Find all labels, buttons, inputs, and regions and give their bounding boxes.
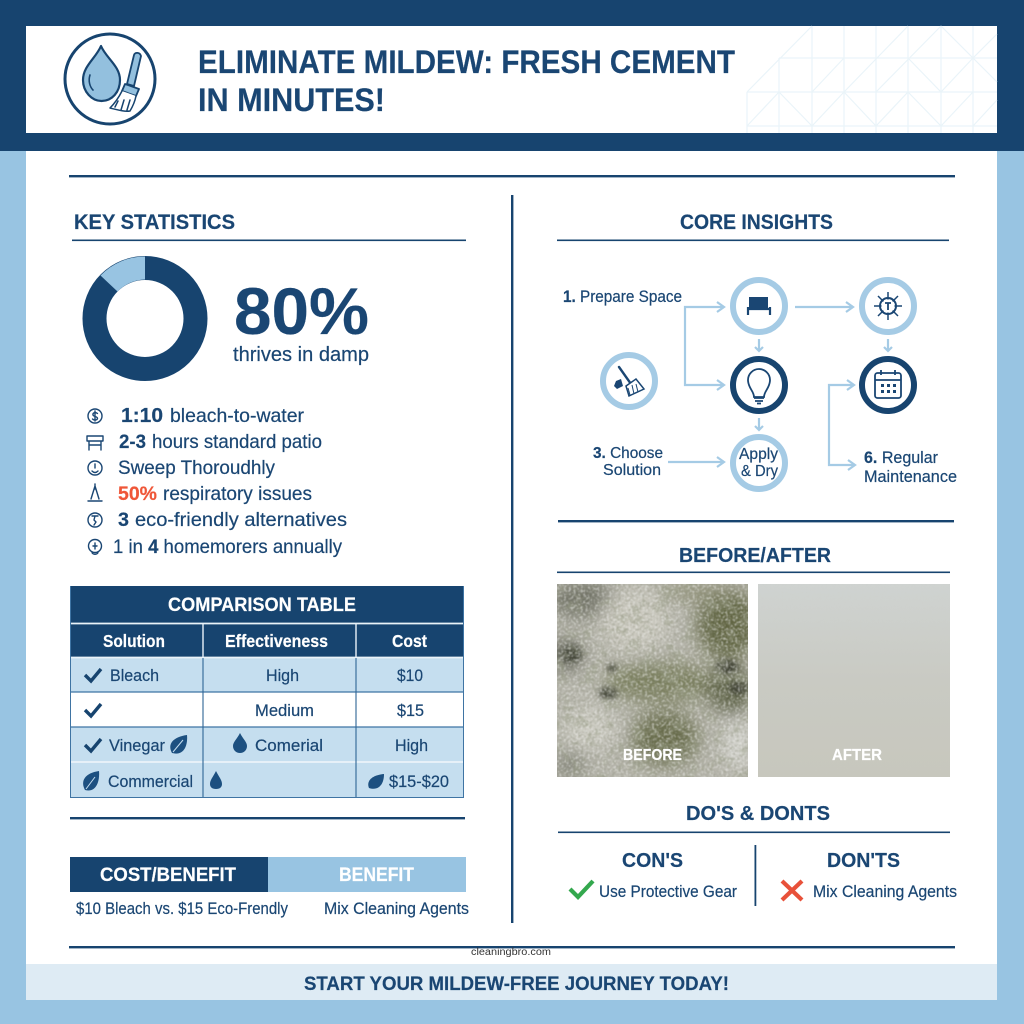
heading: core insights: CORE INSIGHTS (680, 211, 833, 234)
photo: after (758, 584, 950, 777)
step: apply and dry circle: & Dry (741, 463, 778, 480)
panel: core insights (557, 211, 957, 489)
icon: light bulb circle (733, 359, 785, 411)
cost benefit text: Mix Cleaning Agents (324, 900, 469, 918)
row: unnamed solution (85, 701, 424, 720)
photo: after: AFTER (832, 747, 882, 764)
list item: patio time: 2-3 (119, 431, 146, 453)
heading: key statistics: KEY STATISTICS (74, 211, 235, 234)
row: vinegar: Vinegar (109, 736, 165, 755)
row: bleach: Bleach (110, 666, 159, 685)
statistic list (87, 405, 347, 558)
title (198, 44, 735, 118)
stat: 80 percent: 80% (234, 274, 369, 348)
step 3 label: 3. Choose (593, 445, 663, 462)
step 3 label (593, 445, 663, 479)
icon: armchair circle (733, 280, 785, 332)
table header row: Effectiveness (225, 631, 328, 651)
donut chart (94, 256, 196, 369)
heading underline (557, 240, 949, 241)
table title band: COMPARISON TABLE (168, 594, 356, 616)
header panel (26, 26, 997, 133)
step 6 label: Maintenance (864, 468, 957, 486)
column: donts (782, 850, 957, 901)
row: vinegar: High (395, 736, 428, 755)
step 3 label: Solution (603, 462, 661, 479)
icon: broom circle (603, 355, 655, 407)
row: commercial: $15-$20 (389, 772, 449, 791)
stat: 80 percent: thrives in damp (233, 344, 369, 366)
heading: before/after: BEFORE/AFTER (679, 544, 831, 567)
column divider (754, 845, 756, 906)
panel: cost and benefit (70, 857, 469, 918)
footer banner: START YOUR MILDEW-FREE JOURNEY TODAY! (304, 973, 729, 995)
icon: gear circle (862, 280, 914, 332)
title: ELIMINATE MILDEW: FRESH CEMENT (198, 44, 735, 80)
list item: patio time: hours standard patio (152, 431, 322, 453)
lower left divider (70, 817, 465, 819)
bottom divider (69, 946, 955, 948)
step 6 label: 6. Regular (864, 449, 938, 467)
row: bleach: High (266, 666, 299, 685)
cost benefit text (76, 900, 469, 918)
column: cons: CON'S (622, 850, 683, 872)
center column divider (511, 195, 513, 923)
heading underline (557, 572, 950, 573)
list item: respiratory: respiratory issues (163, 483, 312, 505)
list item: homeowners: 1 in 4 homemorers annually (113, 536, 342, 558)
row: commercial: Commercial (108, 772, 193, 791)
icon: calendar circle (862, 359, 914, 411)
panel: before and after (547, 544, 950, 777)
panel: dos and donts (558, 802, 957, 906)
cost benefit bar (70, 857, 466, 892)
list item: respiratory: 50% (118, 483, 157, 505)
title: IN MINUTES! (198, 82, 385, 118)
cost benefit text: $10 Bleach vs. $15 Eco-Frendly (76, 900, 289, 918)
white row background (71, 692, 463, 727)
list item: sweep: Sweep Thoroudhly (118, 457, 275, 479)
process arrows (668, 302, 892, 470)
row: bleach (85, 666, 423, 685)
heading underline (72, 240, 466, 241)
photo: before: BEFORE (623, 747, 682, 764)
main white panel (26, 151, 997, 964)
right divider (558, 520, 954, 522)
source credit: cleaningbro.com (471, 947, 551, 958)
icon: water drop and brush (65, 34, 155, 124)
list item: bleach ratio: bleach-to-water (170, 405, 304, 427)
comparison table (70, 586, 464, 798)
table title band (71, 586, 463, 623)
row: unnamed solution: $15 (397, 701, 424, 720)
column: cons: Use Protective Gear (599, 883, 737, 901)
top divider (69, 175, 955, 177)
row: commercial (83, 771, 449, 791)
cost benefit bar: BENEFIT (339, 865, 414, 886)
cost benefit bar: COST/BENEFIT (100, 865, 236, 886)
row: vinegar: Comerial (255, 736, 323, 755)
row: bleach: $10 (397, 666, 423, 685)
top navy band (0, 0, 1024, 151)
list item: respiratory (88, 483, 312, 505)
row: unnamed solution: Medium (255, 701, 314, 720)
table header row: Cost (392, 631, 427, 651)
table header row: Solution (103, 631, 165, 651)
table header row (71, 624, 463, 657)
panel: key statistics (72, 211, 466, 558)
list item: bleach ratio: 1:10 (121, 405, 163, 427)
list item: eco alternatives: eco-friendly alternatives (135, 509, 347, 531)
row: vinegar (85, 733, 428, 755)
step 1 label: 1. Prepare Space (563, 288, 682, 306)
column: donts: Mix Cleaning Agents (813, 883, 957, 901)
photo: before (557, 584, 748, 777)
table grid (71, 624, 463, 797)
list item: eco alternatives: 3 (118, 509, 129, 531)
step 6 label (864, 449, 957, 486)
step: apply and dry circle: Apply (739, 446, 778, 463)
heading underline (558, 832, 950, 833)
heading: dos and donts: DO'S & DONTS (686, 802, 830, 825)
column: donts: DON'TS (827, 850, 900, 872)
list item: bleach ratio (88, 405, 304, 427)
step: apply and dry circle (733, 437, 785, 489)
column: cons (570, 850, 737, 901)
footer banner (26, 964, 997, 1000)
